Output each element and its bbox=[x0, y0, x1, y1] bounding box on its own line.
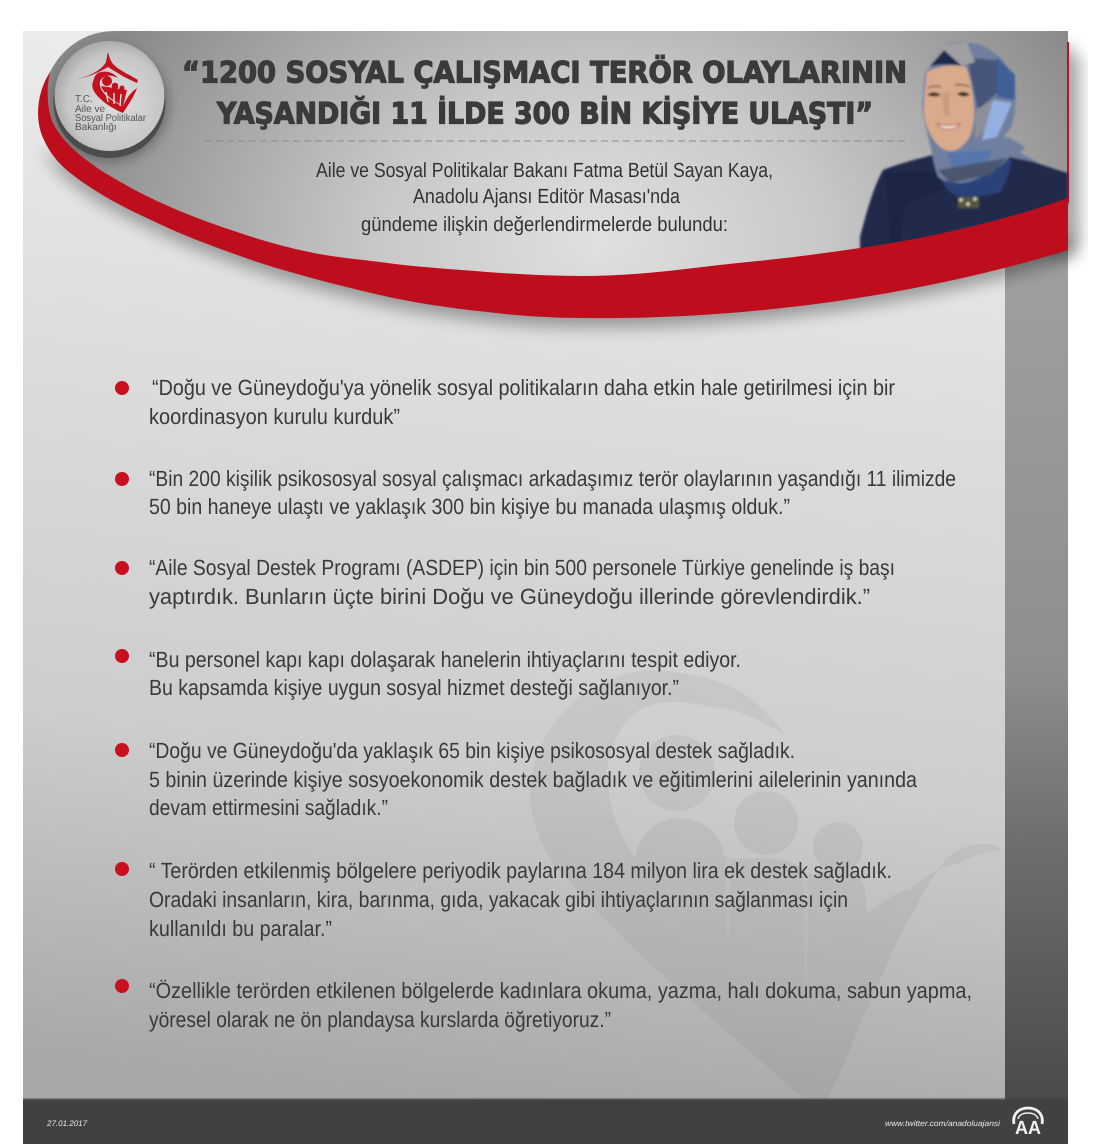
subtitle: gündeme ilişkin değerlendirmelerde bulundu: bbox=[361, 213, 728, 236]
portrait: minister bbox=[860, 42, 1068, 255]
bullet 6: kullanıldı bu paralar.” bbox=[149, 916, 332, 941]
logo text: Bakanlığı bbox=[75, 122, 117, 133]
bullet 5: devam ettirmesini sağladık.” bbox=[149, 795, 388, 820]
icon: heart and family bbox=[92, 72, 137, 113]
bullet 1 bbox=[115, 375, 895, 429]
title: “1200 SOSYAL ÇALIŞMACI TERÖR OLAYLARININ bbox=[182, 54, 907, 90]
eyes bbox=[927, 92, 941, 96]
bullet 4: Bu kapsamda kişiye uygun sosyal hizmet desteği sağlanıyor.” bbox=[149, 675, 679, 700]
panel: right side strip bbox=[1005, 240, 1068, 1100]
inner collar bbox=[938, 160, 1012, 197]
bullet 6 bbox=[115, 858, 892, 941]
panel: header bbox=[43, 31, 1068, 296]
logo text: Sosyal Politikalar bbox=[75, 113, 147, 124]
hair cap bbox=[930, 50, 962, 66]
bullet 3 bbox=[115, 555, 895, 609]
bullet 7: “Özellikle terörden etkilenen bölgelerde kadınlara okuma, yazma, halı dokuma, sabun yapma, bbox=[149, 978, 972, 1003]
logo text: T.C. bbox=[75, 94, 93, 105]
source url: www.twitter.com/anadoluajansi bbox=[885, 1119, 1000, 1128]
bullet 2: 50 bin haneye ulaştı ve yaklaşık 300 bin kişiye bu manada ulaşmış olduk.” bbox=[149, 494, 790, 519]
subtitle: Aile ve Sosyal Politikalar Bakanı Fatma Betül Sayan Kaya, bbox=[316, 159, 773, 182]
logo text: Aile ve bbox=[75, 104, 105, 115]
panel: header shadow bbox=[1000, 45, 1080, 258]
bullet 7: yöresel olarak ne ön plandaysa kurslarda öğretiyoruz.” bbox=[149, 1007, 611, 1032]
icon: Anadolu Agency logo bbox=[1014, 1108, 1042, 1139]
bullet 5: “Doğu ve Güneydoğu'da yaklaşık 65 bin kişiye psikososyal destek sağladık. bbox=[149, 738, 795, 763]
watermark: ministry heart logo bbox=[530, 670, 1003, 1098]
mouth bbox=[937, 124, 960, 129]
title: YAŞANDIĞI 11 İLDE 300 BİN KİŞİYE ULAŞTI” bbox=[216, 96, 873, 130]
bullet 6: Oradaki insanların, kira, barınma, gıda, yakacak gibi ihtiyaçlarının sağlanması için bbox=[149, 887, 848, 912]
bullet 5: 5 binin üzerinde kişiye sosyoekonomik destek bağladık ve eğitimlerini ailelerinin yanında bbox=[149, 767, 918, 792]
icon: roof bbox=[77, 52, 138, 83]
bullet 4: “Bu personel kapı kapı dolaşarak hanelerin ihtiyaçlarını tespit ediyor. bbox=[149, 647, 741, 672]
bullet 6: “ Terörden etkilenmiş bölgelere periyodik paylarına 184 milyon lira ek destek sağladık. bbox=[149, 858, 892, 883]
scarf bbox=[922, 42, 1040, 183]
brooch bbox=[958, 197, 979, 208]
title bbox=[182, 54, 907, 130]
logo text bbox=[75, 94, 147, 133]
bullet 2: “Bin 200 kişilik psikososyal sosyal çalışmacı arkadaşımız terör olaylarının yaşandığı 11 ilimizde bbox=[149, 466, 956, 491]
swoosh shadow bbox=[44, 149, 1068, 327]
bullet 5 bbox=[115, 738, 918, 820]
bullet 1: koordinasyon kurulu kurduk” bbox=[149, 404, 400, 429]
swoosh: red band bbox=[38, 72, 1068, 318]
icon: Anadolu Agency logo: AA bbox=[1015, 1118, 1041, 1139]
jacket bbox=[860, 155, 1068, 255]
bullet 3: yaptırdık. Bunların üçte birini Doğu ve Güneydoğu illerinde görevlendirdik.” bbox=[149, 584, 870, 609]
bullet 3: “Aile Sosyal Destek Programı (ASDEP) için bin 500 personele Türkiye genelinde iş başı bbox=[149, 555, 895, 580]
lapel bbox=[884, 172, 944, 247]
accent: red right edge bbox=[1067, 42, 1069, 202]
subtitle bbox=[316, 159, 773, 236]
face bbox=[924, 65, 974, 151]
logo: ministry badge bbox=[54, 41, 168, 161]
bullet 2 bbox=[115, 466, 956, 519]
footer bar bbox=[23, 1098, 1068, 1144]
bullet 1: “Doğu ve Güneydoğu'ya yönelik sosyal politikaların daha etkin hale getirilmesi için bir bbox=[152, 375, 895, 400]
date: 27.01.2017 bbox=[46, 1119, 88, 1128]
subtitle: Anadolu Ajansı Editör Masası'nda bbox=[413, 185, 681, 208]
bullet 7 bbox=[115, 978, 972, 1032]
bullet 4 bbox=[115, 647, 741, 700]
